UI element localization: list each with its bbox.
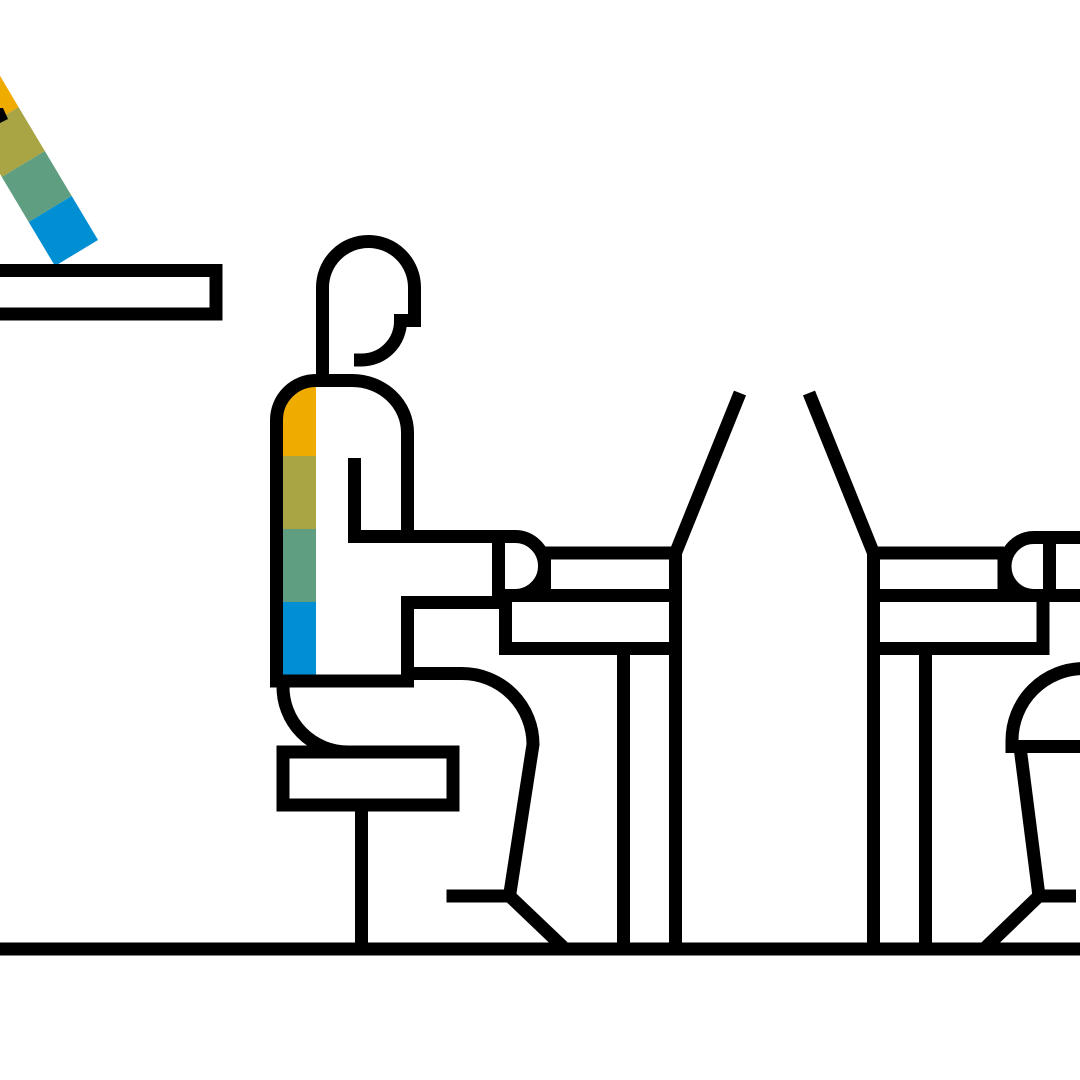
desk top [874, 596, 1043, 648]
colour bands on the seated person's back [280, 384, 316, 676]
icon: tilted colour-striped pencil [0, 74, 98, 266]
shelf on the left [0, 270, 216, 314]
laptop base [874, 553, 1080, 596]
thigh and shin [408, 674, 533, 896]
arm and hand [354, 458, 544, 681]
foot [446, 896, 563, 947]
floor line [0, 942, 1080, 956]
left person [276, 242, 563, 949]
head outline [322, 242, 414, 381]
right desk and laptop [809, 393, 1080, 949]
stool [283, 752, 453, 949]
shin [1020, 747, 1039, 896]
seat line [1006, 740, 1080, 753]
desk leg [617, 648, 630, 949]
torso outline [276, 380, 414, 681]
hand and arm [1005, 538, 1080, 596]
laptop screen and desk end [676, 393, 740, 949]
desk leg [919, 648, 932, 949]
laptop base [498, 553, 676, 596]
right person [986, 538, 1080, 947]
desk top [506, 596, 676, 648]
laptop screen and desk end [809, 393, 874, 949]
thigh curve [1012, 668, 1080, 753]
laptop base side [998, 553, 1010, 595]
laptop base side [538, 553, 551, 595]
left desk and laptop [498, 393, 740, 949]
foot [986, 896, 1076, 947]
buttock curve [283, 686, 348, 752]
